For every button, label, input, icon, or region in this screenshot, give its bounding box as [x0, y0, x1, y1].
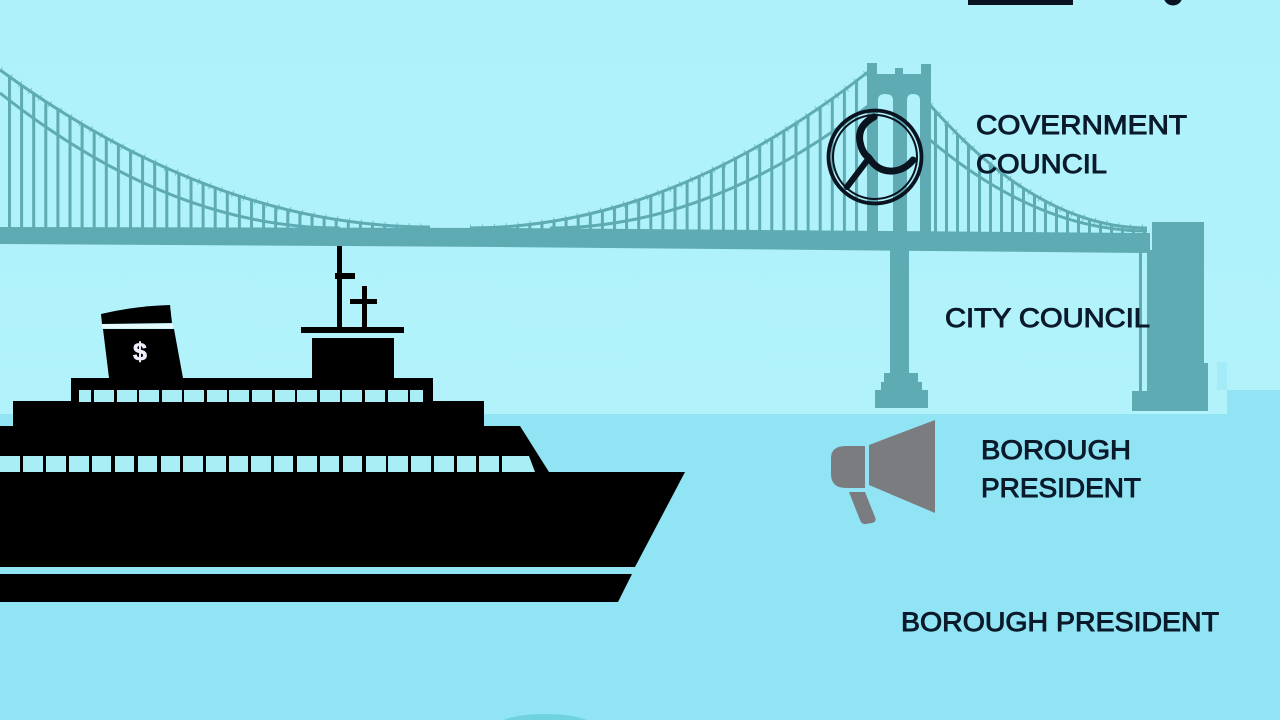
label: borough president with megaphone: BOROUGH	[981, 435, 1131, 465]
label: government council: COUNCIL	[976, 149, 1107, 179]
main tower	[867, 63, 931, 235]
label: borough president with megaphone	[981, 435, 1141, 503]
label: government council: COVERNMENT	[976, 110, 1187, 140]
hull lower band	[0, 574, 632, 602]
main mast	[335, 246, 355, 328]
label: borough president with megaphone: PRESIDENT	[981, 473, 1141, 503]
funnel dollar sign: $	[133, 338, 147, 366]
cropped dome at bottom edge	[497, 714, 593, 720]
background sky	[0, 0, 1280, 420]
small mast	[350, 286, 377, 328]
distant faint building	[1217, 362, 1227, 390]
funnel white stripe	[102, 324, 173, 328]
right anchorage	[1132, 222, 1208, 411]
tower pier	[875, 245, 928, 408]
icon: circular emblem	[828, 110, 922, 204]
ship	[0, 246, 685, 602]
icon: megaphone	[831, 420, 935, 524]
cropped icon at top edge	[968, 0, 1182, 6]
lower windows	[0, 456, 535, 472]
hull	[0, 472, 685, 567]
background water	[0, 390, 1280, 720]
road deck	[0, 227, 1150, 253]
anchorage thin support	[1139, 250, 1142, 391]
bridge silhouette	[0, 63, 1208, 411]
label: city council: CITY COUNCIL	[945, 303, 1150, 333]
label: borough president: BOROUGH PRESIDENT	[901, 607, 1219, 637]
mast platform	[301, 327, 404, 333]
funnel cap	[101, 305, 172, 324]
cable ticks	[0, 70, 1147, 228]
right span hangers	[930, 105, 1147, 240]
main cables	[0, 70, 1147, 231]
upper windows	[79, 390, 423, 402]
span hangers	[0, 70, 868, 235]
label: government council	[976, 110, 1187, 179]
lower deck	[0, 329, 549, 472]
